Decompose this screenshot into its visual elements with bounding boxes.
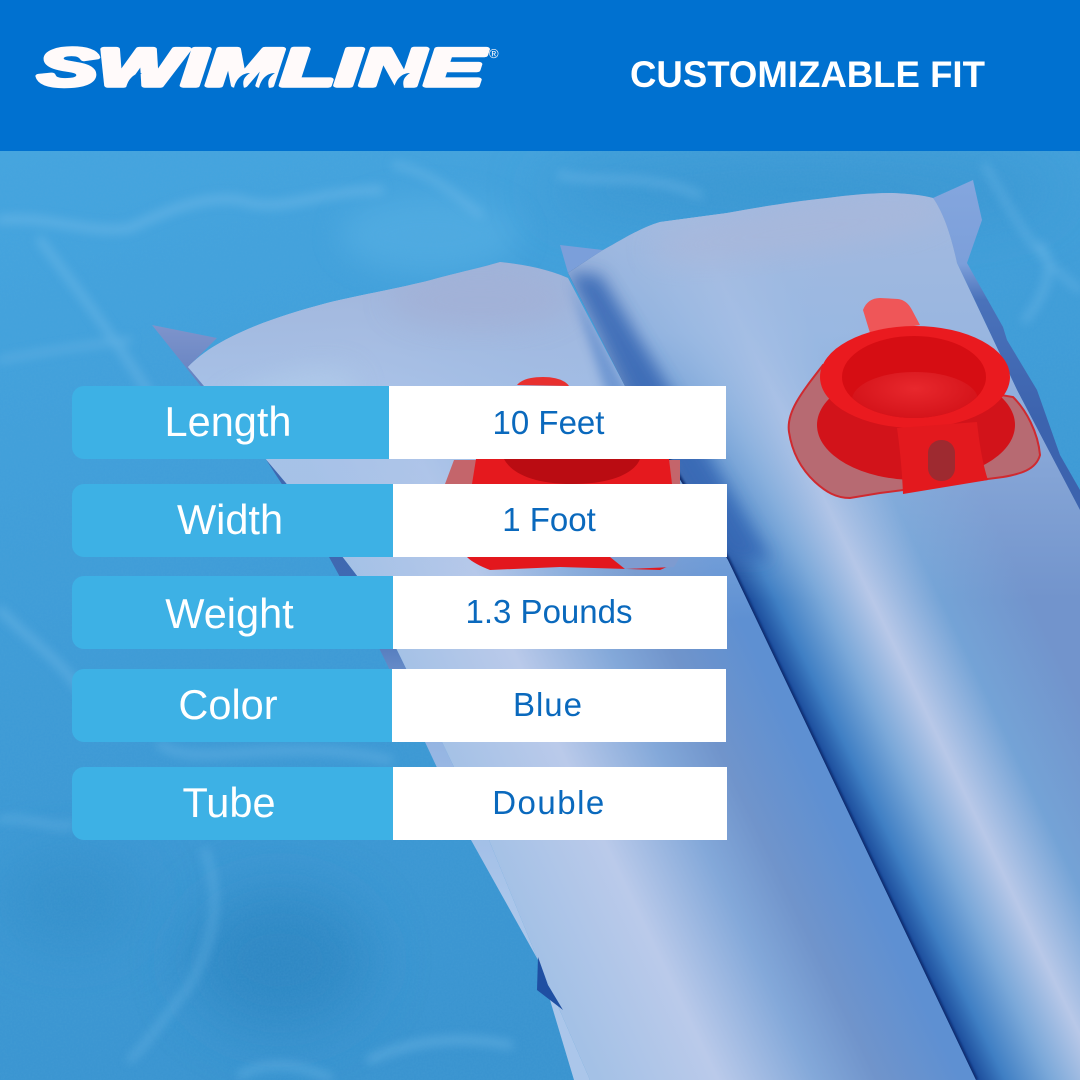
length label: Length [165, 398, 291, 445]
logo: Swimline wordmark: ® [489, 46, 499, 61]
left chamber seam flap [152, 325, 590, 1080]
spec table [72, 386, 727, 840]
width value: 1 Foot [502, 501, 596, 538]
length value: 10 Feet [493, 404, 604, 441]
red valve cap: right chamber [789, 298, 1040, 498]
length value [389, 386, 726, 458]
logo: Swimline wordmark [35, 38, 499, 96]
red valve cap: left chamber [445, 377, 680, 570]
corner flap, top left [560, 245, 603, 273]
width label: Width [177, 496, 283, 543]
tube label [72, 767, 393, 840]
pull tab [863, 298, 920, 333]
water tube: left chamber [150, 240, 1000, 1080]
tube label: Tube [182, 779, 276, 826]
length label [72, 386, 389, 458]
seam pocket [537, 957, 563, 1010]
strap with slot [897, 422, 988, 494]
heading: customizable fit: CUSTOMIZABLE FIT [630, 54, 985, 95]
water tube: right chamber [560, 180, 1080, 1080]
weight label: Weight [165, 590, 294, 637]
width label [72, 484, 393, 556]
color value: Blue [513, 686, 583, 723]
ring [820, 326, 1010, 428]
tube value: Double [492, 784, 606, 821]
weight value [393, 576, 727, 648]
neck [817, 370, 1015, 480]
width value [393, 484, 727, 556]
dome [854, 372, 977, 418]
header band [0, 0, 1080, 151]
weight value: 1.3 Pounds [466, 593, 632, 630]
color value [392, 669, 726, 742]
weight label [72, 576, 393, 648]
logo: Swimline wordmark: SWIMLINE [38, 38, 487, 96]
clear flange [789, 365, 1040, 498]
color label [72, 669, 392, 742]
side seam flap [933, 180, 1080, 515]
color label: Color [178, 681, 278, 728]
tube value [393, 767, 727, 840]
